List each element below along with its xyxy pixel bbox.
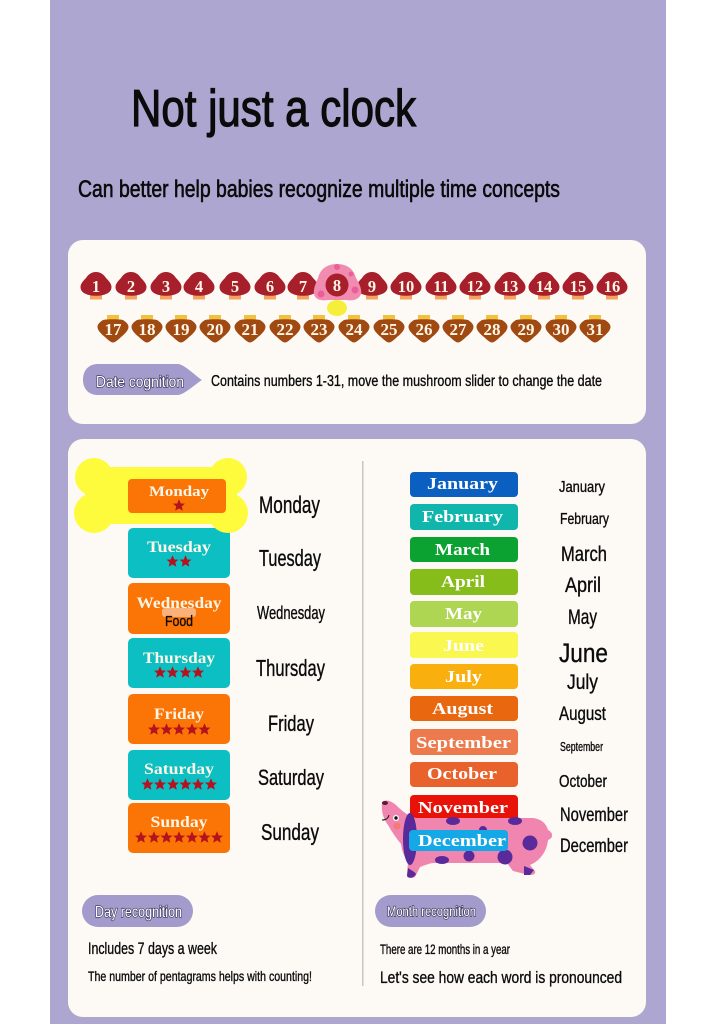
card: November — [410, 795, 518, 821]
card: November: November — [418, 798, 508, 817]
mushroom numbers row 1 to 16: 3 — [162, 277, 170, 296]
card: Friday: Friday — [154, 706, 204, 723]
month cards — [410, 472, 518, 821]
mushroom slider on 8: 8 — [333, 276, 341, 295]
mushroom numbers row 1 to 16: 14 — [536, 277, 552, 296]
card: February: February — [422, 507, 504, 526]
card: June: June — [443, 636, 484, 655]
panel: days and months — [68, 439, 646, 1017]
card: January: January — [427, 474, 499, 493]
date description: Contains numbers 1-31, move the mushroom slider to change the date — [211, 373, 602, 390]
card: October — [410, 762, 518, 787]
card: April: April — [441, 572, 485, 591]
badge: date cognition: Date cognition — [96, 374, 184, 391]
mushroom numbers row 17 to 31: 26 — [416, 320, 432, 339]
card: Saturday: Saturday — [144, 761, 214, 778]
card: June — [410, 632, 518, 658]
day text: pentagrams: The number of pentagrams helps with counting! — [88, 968, 312, 984]
mushroom numbers row 1 to 16: 5 — [231, 277, 239, 296]
mushroom numbers row 17 to 31: 17 — [104, 320, 122, 339]
day words: Thursday — [256, 655, 325, 681]
mushroom numbers row 17 to 31: 18 — [138, 320, 156, 339]
mushroom numbers row 17 to 31: 24 — [346, 320, 363, 339]
mushroom numbers row 17 to 31: 29 — [518, 320, 534, 339]
card: Monday: Monday — [149, 484, 210, 500]
month words: June — [559, 638, 608, 668]
month words: September — [560, 740, 603, 754]
day words: Friday — [268, 711, 314, 736]
card: December: December — [418, 831, 506, 850]
month text: 12 months: There are 12 months in a year — [380, 942, 510, 957]
icon: yellow bone — [74, 458, 248, 533]
mushroom numbers row 1 to 16: 1 — [92, 277, 100, 296]
card: Wednesday: Food — [165, 613, 193, 630]
day words: Tuesday — [259, 545, 321, 571]
badge: date cognition — [83, 364, 202, 395]
card: Monday — [128, 479, 226, 513]
mushroom numbers row 1 to 16: 4 — [195, 277, 203, 296]
card: March — [410, 537, 518, 562]
subtitle: Can better help babies recognize multiple time concepts — [78, 176, 560, 203]
mushroom numbers row 17 to 31: 25 — [380, 320, 398, 339]
month words: April — [565, 574, 601, 597]
card: May: May — [445, 604, 483, 623]
card: Thursday: Thursday — [143, 650, 215, 667]
badge: month recognition — [375, 895, 486, 927]
card: July: July — [445, 667, 483, 686]
card: January — [410, 472, 518, 497]
card: September — [410, 729, 518, 755]
card: December — [409, 830, 508, 851]
icon: pink spotted dog — [382, 801, 552, 878]
title: Not just a clock — [131, 80, 417, 138]
month words — [559, 479, 628, 857]
mushroom numbers row 1 to 16: 12 — [467, 277, 483, 296]
mushroom numbers row 17 to 31: 20 — [206, 320, 224, 339]
mushroom numbers row 17 to 31: 31 — [586, 320, 604, 339]
month words: May — [568, 606, 597, 629]
mushroom numbers row 17 to 31: 21 — [242, 320, 258, 339]
month words: July — [567, 671, 598, 694]
month words: December — [560, 835, 628, 857]
month words: August — [559, 704, 607, 725]
card: September: September — [416, 733, 511, 752]
card: August: August — [432, 699, 494, 718]
mushroom numbers row 17 to 31: 19 — [172, 320, 190, 339]
mushroom numbers row 17 to 31: 28 — [484, 320, 500, 339]
badge: day recognition — [82, 895, 193, 927]
mushroom numbers row 1 to 16: 6 — [266, 277, 274, 296]
card: Tuesday — [128, 528, 230, 578]
card: May — [410, 601, 518, 627]
mushroom numbers row 1 to 16: 13 — [502, 277, 518, 296]
day words: Sunday — [261, 819, 319, 845]
mushroom numbers row 1 to 16: 11 — [433, 277, 449, 296]
day words: Monday — [259, 492, 320, 519]
mushroom numbers row 17 to 31: 30 — [552, 320, 570, 339]
day cards — [74, 458, 248, 853]
card: Wednesday — [128, 583, 230, 634]
month words: March — [561, 543, 607, 566]
card: February — [410, 504, 518, 530]
day text: 7 days: Includes 7 days a week — [88, 940, 218, 958]
card: Tuesday: Tuesday — [147, 539, 211, 556]
badge: day recognition: Day recognition — [95, 904, 182, 921]
mushroom numbers row 1 to 16 — [80, 272, 628, 300]
card: October: October — [427, 764, 497, 783]
day words — [256, 492, 325, 845]
mushroom numbers row 1 to 16: 10 — [398, 277, 414, 296]
panel: date cognition — [68, 240, 646, 424]
card: Saturday — [128, 750, 230, 800]
card: March: March — [435, 540, 490, 559]
card: Thursday — [128, 638, 230, 688]
mushroom slider on 8 — [314, 264, 361, 316]
card: Friday — [128, 694, 230, 744]
card: July — [410, 664, 518, 689]
mushroom numbers row 1 to 16: 15 — [570, 277, 586, 296]
mushroom numbers row 17 to 31: 22 — [276, 320, 294, 339]
mushroom numbers row 17 to 31: 23 — [310, 320, 328, 339]
mushroom numbers row 1 to 16: 16 — [604, 277, 620, 296]
mushroom numbers row 17 to 31: 27 — [450, 320, 467, 339]
month words: February — [560, 511, 609, 528]
month words: November — [560, 804, 628, 826]
card: Wednesday: Wednesday — [136, 595, 222, 612]
card: Sunday — [128, 803, 230, 853]
month words: January — [559, 479, 605, 496]
mushroom numbers row 1 to 16: 7 — [299, 277, 307, 296]
mushroom numbers row 17 to 31 — [98, 315, 610, 342]
mushroom numbers row 1 to 16: 2 — [127, 277, 135, 296]
mushroom numbers row 1 to 16: 9 — [368, 277, 376, 296]
card: April — [410, 569, 518, 595]
card: Sunday: Sunday — [150, 814, 208, 831]
day words: Saturday — [258, 765, 324, 790]
card: August — [410, 696, 518, 721]
month text: pronounced: Let's see how each word is pronounced — [380, 968, 622, 987]
month words: October — [559, 771, 607, 791]
badge: month recognition: Month recognition — [387, 904, 476, 919]
day words: Wednesday — [257, 603, 325, 623]
